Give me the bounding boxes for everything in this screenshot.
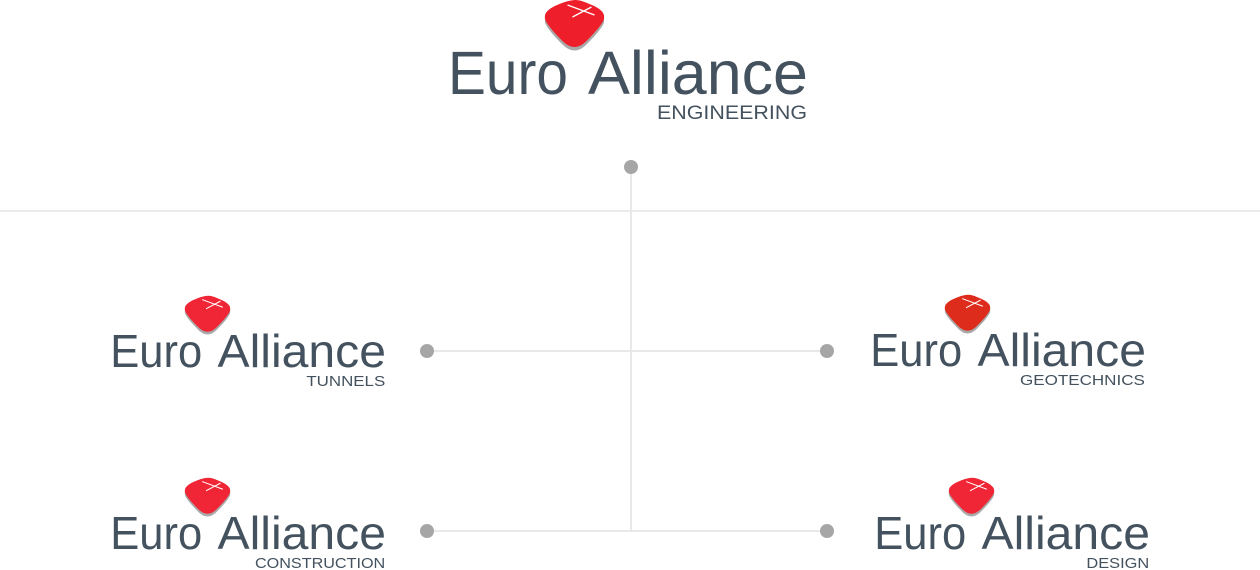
connector lines xyxy=(427,167,827,532)
logo: Euro Alliance Tunnels: Alliance xyxy=(217,325,386,377)
logo: Euro Alliance Construction: Alliance xyxy=(217,507,386,559)
icon: red emblem xyxy=(185,296,230,334)
logo: Euro Alliance Engineering: Alliance xyxy=(588,39,808,107)
division label: GEOTECHNICS xyxy=(1020,372,1145,389)
connector dot: design xyxy=(820,524,834,538)
wordmark: Euro xyxy=(448,39,568,107)
connector dot: tunnels xyxy=(420,344,434,358)
icon: red emblem xyxy=(945,295,990,333)
logo: Euro Alliance Construction xyxy=(110,478,386,570)
connector dot: geotechnics xyxy=(820,344,834,358)
icon: red emblem xyxy=(185,478,230,516)
icon: red emblem xyxy=(545,0,604,50)
horizontal divider xyxy=(0,210,1260,212)
icon: red emblem xyxy=(949,478,994,516)
logo: Euro Alliance Geotechnics: Alliance xyxy=(977,324,1146,376)
logo: Euro Alliance Design xyxy=(874,478,1150,570)
logo: Euro Alliance Tunnels xyxy=(110,296,386,390)
connector dot: construction xyxy=(420,524,434,538)
logo: Euro Alliance Design: Alliance xyxy=(981,507,1150,559)
logo: Euro Alliance Engineering xyxy=(448,0,808,124)
wordmark: Euro xyxy=(110,325,202,377)
division label: TUNNELS xyxy=(306,373,385,390)
connector dot: top xyxy=(624,160,638,174)
wordmark: Euro xyxy=(874,507,966,559)
division label: ENGINEERING xyxy=(657,102,807,124)
wordmark: Euro xyxy=(870,324,962,376)
wordmark: Euro xyxy=(110,507,202,559)
logo: Euro Alliance Geotechnics xyxy=(870,295,1146,389)
